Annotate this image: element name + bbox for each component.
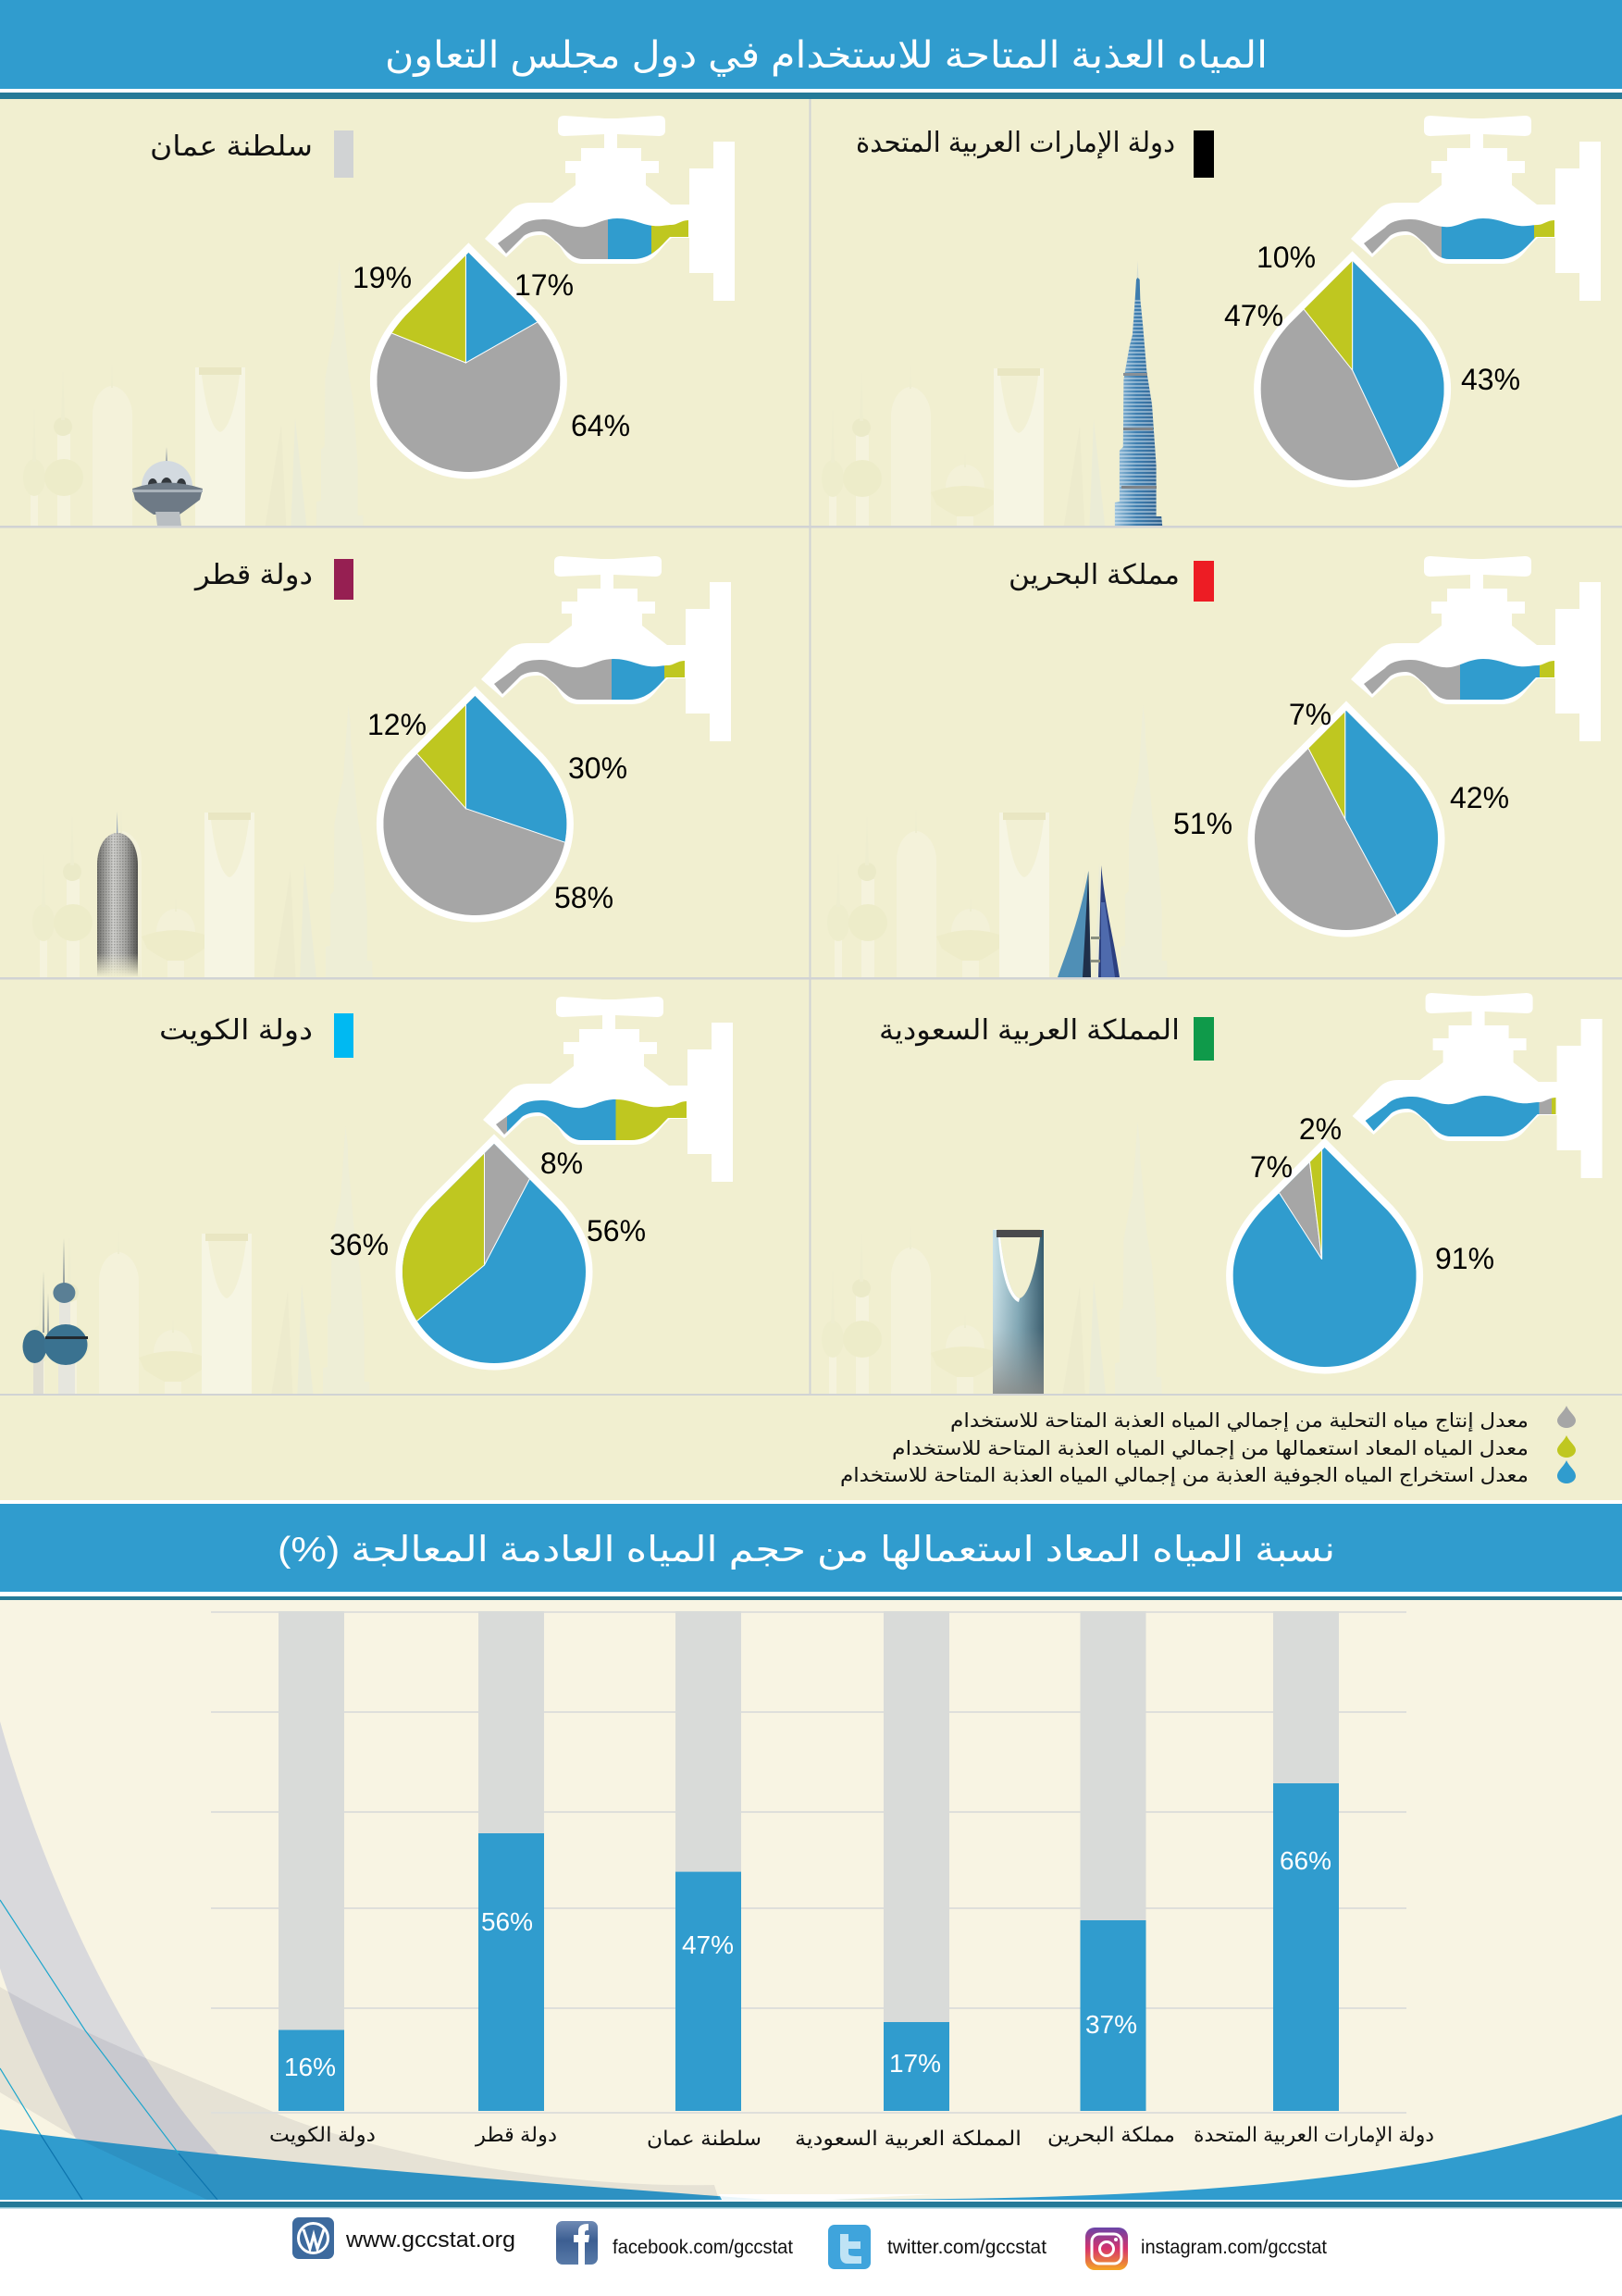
footer: facebook bbox=[556, 2221, 793, 2265]
skyline background bbox=[829, 368, 1044, 526]
panel: Sultanate of Oman bbox=[0, 99, 810, 559]
value labels: 51% bbox=[1173, 807, 1232, 840]
icon: twitter bbox=[828, 2225, 871, 2269]
country colour swatch bbox=[1194, 130, 1214, 178]
water drop pie bbox=[1254, 252, 1451, 487]
value labels bbox=[1250, 1112, 1494, 1275]
country name: سلطنة عمان bbox=[150, 131, 313, 162]
legend: reused water: معدل المياه المعاد استعمالها من إجمالي المياه العذبة المتاحة للاستخدام bbox=[892, 1438, 1529, 1460]
icon: facebook bbox=[556, 2221, 598, 2265]
landmark: Kingdom Centre bbox=[993, 1230, 1044, 1395]
bar chart bbox=[211, 1611, 1434, 2150]
country name: مملكة البحرين bbox=[1009, 560, 1180, 590]
country colour swatch bbox=[1194, 1017, 1214, 1061]
landmark: Burj Khalifa bbox=[1115, 261, 1162, 527]
value labels bbox=[329, 1147, 646, 1261]
footer: website bbox=[292, 2217, 515, 2259]
tap icon bbox=[481, 556, 731, 741]
header: reuse chart title bbox=[0, 1504, 1622, 1600]
value labels: 36% bbox=[329, 1228, 389, 1261]
value labels bbox=[353, 261, 630, 442]
value labels bbox=[1224, 241, 1520, 396]
value labels: 30% bbox=[568, 751, 627, 785]
value labels: 42% bbox=[1450, 781, 1509, 814]
bar: Qatar: دولة قطر bbox=[475, 2123, 557, 2146]
panel: Kingdom of Saudi Arabia bbox=[811, 979, 1622, 1421]
value labels bbox=[1173, 698, 1509, 840]
water drop pie bbox=[1247, 701, 1445, 937]
bar: Oman bbox=[647, 1611, 761, 2150]
landmark: Oman incense tower bbox=[132, 447, 203, 526]
bar: Kuwait bbox=[269, 1611, 376, 2146]
bar: Saudi Arabia: المملكة العربية السعودية bbox=[795, 2127, 1021, 2150]
water drop pie bbox=[396, 1135, 592, 1370]
bar: Saudi Arabia: 17% bbox=[889, 2049, 941, 2078]
value labels bbox=[367, 708, 627, 914]
value labels: 91% bbox=[1435, 1242, 1494, 1275]
tap icon bbox=[485, 116, 735, 301]
tap icon bbox=[1353, 993, 1603, 1178]
header: main title: المياه العذبة المتاحة للاستخدام في دول مجلس التعاون bbox=[385, 35, 1268, 77]
value labels: 56% bbox=[587, 1214, 646, 1247]
value labels: 12% bbox=[367, 708, 427, 741]
tap icon bbox=[1351, 556, 1601, 741]
legend: groundwater bbox=[840, 1460, 1576, 1487]
landmark: Bahrain World Trade Center bbox=[1058, 865, 1120, 977]
bar: UAE: 66% bbox=[1280, 1846, 1331, 1875]
value labels: 47% bbox=[1224, 299, 1283, 332]
bar: Bahrain bbox=[1047, 1611, 1175, 2146]
panel: State of Kuwait bbox=[0, 979, 810, 1425]
header: main title bbox=[0, 0, 1622, 99]
country colour swatch bbox=[1194, 561, 1214, 602]
skyline background bbox=[40, 813, 254, 977]
water drop pie bbox=[1223, 1132, 1427, 1377]
landmark: Kuwait Towers bbox=[22, 1238, 88, 1395]
water drop pie bbox=[370, 242, 567, 479]
country colour swatch bbox=[334, 130, 353, 178]
country colour swatch bbox=[334, 1013, 353, 1058]
tap icon bbox=[1351, 116, 1601, 301]
bar: UAE: دولة الإمارات العربية المتحدة bbox=[1194, 2123, 1434, 2146]
value labels: 58% bbox=[554, 881, 613, 914]
panel: State of Qatar bbox=[0, 527, 810, 1004]
bar: Qatar bbox=[475, 1611, 557, 2146]
value labels: 8% bbox=[540, 1147, 583, 1180]
bar: Bahrain: مملكة البحرين bbox=[1047, 2123, 1175, 2146]
panel: United Arab Emirates bbox=[811, 99, 1622, 560]
bar: Kuwait: 16% bbox=[284, 2053, 336, 2081]
panel: Kingdom of Bahrain bbox=[811, 527, 1622, 1004]
value labels: 19% bbox=[353, 261, 412, 294]
value labels: 17% bbox=[514, 268, 574, 302]
value labels: 10% bbox=[1257, 241, 1316, 274]
chart section background bbox=[0, 1600, 1622, 2202]
landmark: Doha tower bbox=[94, 812, 141, 977]
bar: Oman: 47% bbox=[682, 1930, 734, 1959]
legend: groundwater: معدل استخراج المياه الجوفية العذبة من إجمالي المياه العذبة المتاحة للاستخدام bbox=[840, 1465, 1529, 1487]
footer: instagram: instagram.com/gccstat bbox=[1141, 2237, 1327, 2258]
bar: Oman: سلطنة عمان bbox=[647, 2127, 761, 2150]
value labels: 43% bbox=[1461, 363, 1520, 396]
bar: UAE bbox=[1194, 1611, 1434, 2146]
country name: دولة قطر bbox=[193, 560, 313, 591]
bar: Bahrain: 37% bbox=[1085, 2010, 1137, 2039]
value labels: 2% bbox=[1299, 1112, 1342, 1146]
value labels: 64% bbox=[571, 409, 630, 442]
country name: المملكة العربية السعودية bbox=[879, 1015, 1180, 1046]
skyline background bbox=[829, 1229, 1044, 1394]
footer: website: www.gccstat.org bbox=[345, 2228, 515, 2253]
water drop pie bbox=[376, 687, 574, 922]
header: reuse chart title: نسبة المياه المعاد استعمالها من حجم المياه العادمة المعالجة (%) bbox=[278, 1531, 1335, 1570]
value labels: 7% bbox=[1289, 698, 1331, 731]
legend bbox=[0, 1396, 1622, 1500]
bar: Kuwait: دولة الكويت bbox=[269, 2123, 376, 2146]
bar: Qatar: 56% bbox=[481, 1907, 533, 1936]
skyline background bbox=[43, 1234, 252, 1394]
bar: Saudi Arabia bbox=[795, 1611, 1021, 2150]
icon: instagram bbox=[1085, 2228, 1128, 2270]
footer: twitter: twitter.com/gccstat bbox=[887, 2237, 1046, 2258]
country colour swatch bbox=[334, 559, 353, 600]
icon: wordpress bbox=[292, 2217, 334, 2259]
legend: desalination: معدل إنتاج مياه التحلية من إجمالي المياه العذبة المتاحة للاستخدام bbox=[950, 1410, 1529, 1433]
footer: instagram bbox=[1085, 2228, 1327, 2270]
tap icon bbox=[483, 997, 733, 1182]
skyline background bbox=[31, 367, 245, 526]
footer: facebook: facebook.com/gccstat bbox=[613, 2237, 793, 2258]
country name: دولة الكويت bbox=[159, 1015, 313, 1047]
country name: دولة الإمارات العربية المتحدة bbox=[856, 128, 1175, 159]
footer: twitter bbox=[828, 2225, 1046, 2269]
legend: desalination bbox=[950, 1406, 1576, 1433]
footer band bbox=[0, 2200, 1622, 2208]
skyline background bbox=[835, 813, 1049, 977]
value labels: 7% bbox=[1250, 1150, 1293, 1184]
